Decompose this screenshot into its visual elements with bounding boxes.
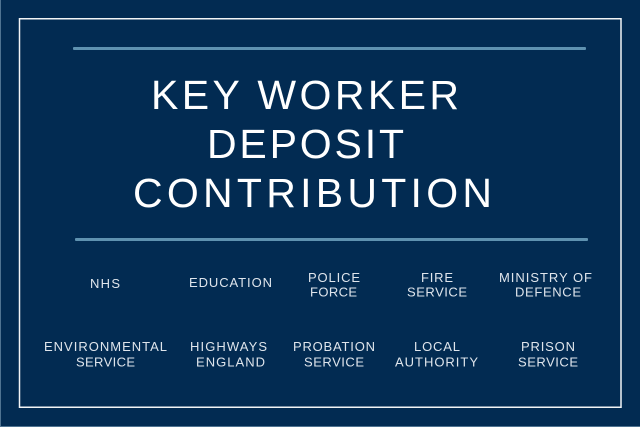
- title: CONTRIBUTION: [133, 170, 492, 216]
- label: Local Authority: AUTHORITY: [395, 354, 478, 370]
- label: Probation Service: SERVICE: [304, 354, 364, 370]
- label: Highways England: [190, 339, 267, 370]
- label: Fire Service: SERVICE: [407, 284, 467, 300]
- label: Ministry of Defence: MINISTRY OF: [499, 270, 592, 285]
- label: Probation Service: [293, 339, 375, 370]
- label: Fire Service: [407, 270, 467, 300]
- label: Local Authority: [395, 339, 478, 370]
- label: Environmental Service: SERVICE: [76, 354, 135, 370]
- label: Police Force: [308, 270, 360, 300]
- label: Environmental Service: [44, 339, 167, 370]
- label: Police Force: FORCE: [310, 284, 357, 300]
- label grid: [44, 270, 592, 370]
- label: Local Authority: LOCAL: [414, 339, 460, 354]
- label: Environmental Service: ENVIRONMENTAL: [44, 339, 167, 354]
- label: Prison Service: PRISON: [521, 339, 575, 354]
- bottom rule: [75, 238, 588, 241]
- top rule: [73, 47, 586, 50]
- title: DEPOSIT: [207, 121, 404, 167]
- label: Ministry of Defence: DEFENCE: [515, 284, 581, 300]
- title: [133, 72, 492, 216]
- label: NHS: NHS: [90, 276, 120, 291]
- label: Police Force: POLICE: [308, 270, 360, 285]
- label: Probation Service: PROBATION: [293, 339, 375, 354]
- label: Ministry of Defence: [499, 270, 592, 300]
- label: Highways England: HIGHWAYS: [190, 339, 267, 354]
- label: Prison Service: SERVICE: [518, 354, 578, 370]
- title: KEY WORKER: [151, 72, 459, 118]
- label: Highways England: ENGLAND: [196, 354, 265, 370]
- label: Prison Service: [518, 339, 578, 370]
- label: Fire Service: FIRE: [421, 270, 453, 285]
- label: Education: EDUCATION: [189, 275, 272, 290]
